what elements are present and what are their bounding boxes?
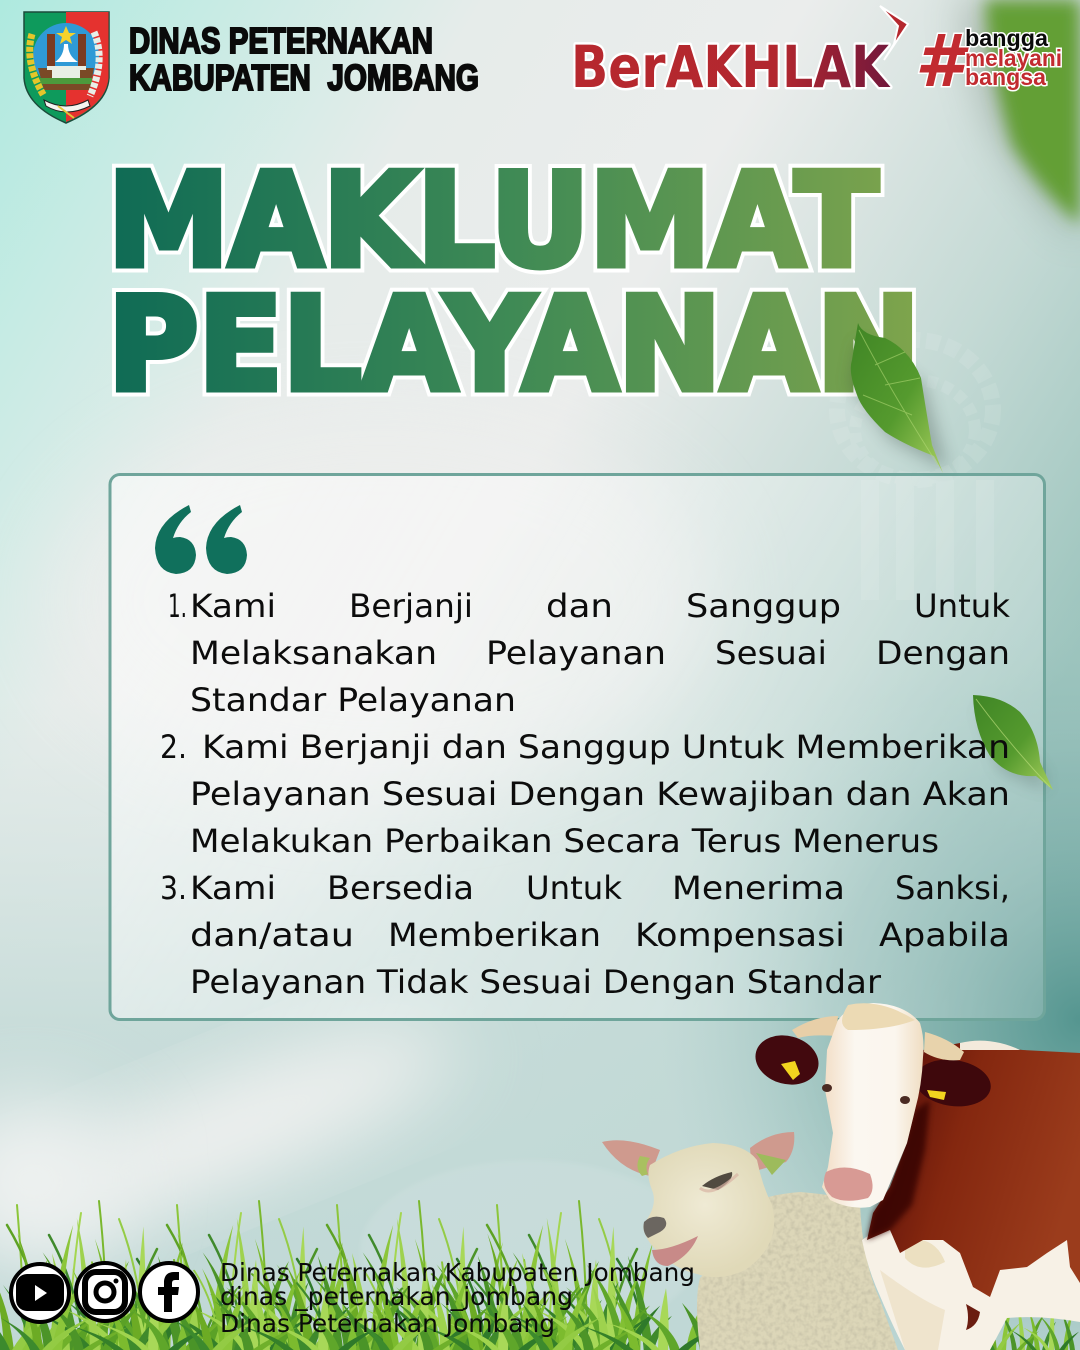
title: MAKLUMAT PELAYANAN: MAKLUMAT	[108, 147, 878, 296]
cow horns	[792, 1016, 838, 1038]
title: MAKLUMAT PELAYANAN: PELAYANAN	[108, 271, 920, 420]
pledge 3: Sanksi,	[895, 869, 1010, 907]
cow white underbody	[862, 1200, 1080, 1350]
#bangga melayani bangsa logo: #	[915, 19, 970, 103]
BerAKHLAK logo: BerAKHLAK	[571, 33, 891, 101]
#bangga melayani bangsa logo: melayani	[965, 45, 1062, 71]
leaf over title	[850, 323, 948, 473]
cow brown coat	[867, 1043, 1080, 1297]
icon: opening quote mark	[155, 505, 247, 574]
leaf over panel	[973, 695, 1053, 790]
pledge 3: Kompensasi	[635, 916, 845, 954]
pledge 3: 3.	[160, 869, 187, 907]
pledge 1: Pelayanan	[486, 634, 666, 672]
pledge 1: Dengan	[876, 634, 1010, 672]
pledge 1: Berjanji	[349, 587, 473, 625]
BerAKHLAK logo	[571, 6, 908, 101]
pledge 1: 1.	[168, 587, 187, 625]
pledge 1: Melaksanakan	[190, 634, 437, 672]
#bangga melayani bangsa logo: bangsa	[965, 64, 1046, 90]
footer: social icons	[11, 1263, 198, 1322]
pledge 1: Sanggup	[686, 587, 841, 625]
icon: YouTube	[11, 1264, 69, 1322]
cow eyes	[822, 1084, 832, 1092]
cow face	[822, 1003, 924, 1208]
icon: Instagram	[76, 1263, 134, 1321]
pledge 1: Sesuai	[715, 634, 827, 672]
pledge 2: Kami Berjanji dan Sanggup Untuk Memberikan	[202, 728, 1010, 766]
header: Jombang regency crest	[24, 12, 109, 123]
title: MAKLUMAT PELAYANAN	[108, 147, 920, 420]
pledge 3: Apabila	[879, 916, 1010, 954]
header: agency name	[129, 20, 479, 98]
illustration: sheep	[602, 1132, 898, 1350]
pledge 3: Menerima	[672, 869, 845, 907]
faint tower watermark	[360, 340, 993, 1340]
pledge 2: Melakukan Perbaikan Secara Terus Menerus	[190, 822, 939, 860]
pledge 3: dan/atau	[190, 916, 354, 954]
title: MAKLUMAT PELAYANAN: PELAYANAN	[108, 271, 920, 420]
pledge 2	[160, 728, 1010, 860]
pledge 2: 2.	[160, 728, 187, 766]
header: agency name: KABUPATEN JOMBANG	[129, 57, 479, 98]
pledge 1: Standar Pelayanan	[190, 681, 516, 719]
header: agency name: DINAS PETERNAKAN	[129, 20, 433, 61]
pledge 1: Kami	[190, 587, 276, 625]
pledge 3: Pelayanan Tidak Sesuai Dengan Standar	[190, 963, 882, 1001]
pledge 3	[160, 869, 1010, 1001]
pledge 3: Memberikan	[388, 916, 601, 954]
footer: social handles: Dinas Peternakan Kabupaten Jombang	[220, 1258, 695, 1287]
pledge 3: Untuk	[526, 869, 622, 907]
cow ears and tags	[750, 1029, 824, 1091]
footer: social handles: Dinas Peternakan Jombang	[220, 1309, 555, 1338]
sheep ears	[602, 1140, 660, 1176]
footer: social handles	[220, 1258, 695, 1338]
pledge 2: Pelayanan Sesuai Dengan Kewajiban dan Akan	[190, 775, 1010, 813]
panel: service pledge	[110, 474, 1053, 1020]
pledge 1: Untuk	[914, 587, 1010, 625]
cow muzzle	[824, 1167, 873, 1201]
grass foreground	[0, 1201, 1079, 1350]
pledge 3: Bersedia	[327, 869, 474, 907]
sheep body and head	[697, 1192, 898, 1350]
title: MAKLUMAT PELAYANAN: MAKLUMAT	[108, 147, 878, 296]
pledge 1	[168, 587, 1010, 719]
footer: social handles: dinas _peternakan_jombang	[220, 1282, 573, 1311]
#bangga melayani bangsa logo	[915, 19, 1062, 103]
top right blurred leaf	[960, 0, 1080, 240]
pledge 1: dan	[546, 587, 613, 625]
#bangga melayani bangsa logo: bangga	[965, 25, 1048, 51]
pledge 3: Kami	[190, 869, 276, 907]
icon: Facebook	[140, 1263, 198, 1321]
illustration: cow	[750, 1003, 1080, 1350]
